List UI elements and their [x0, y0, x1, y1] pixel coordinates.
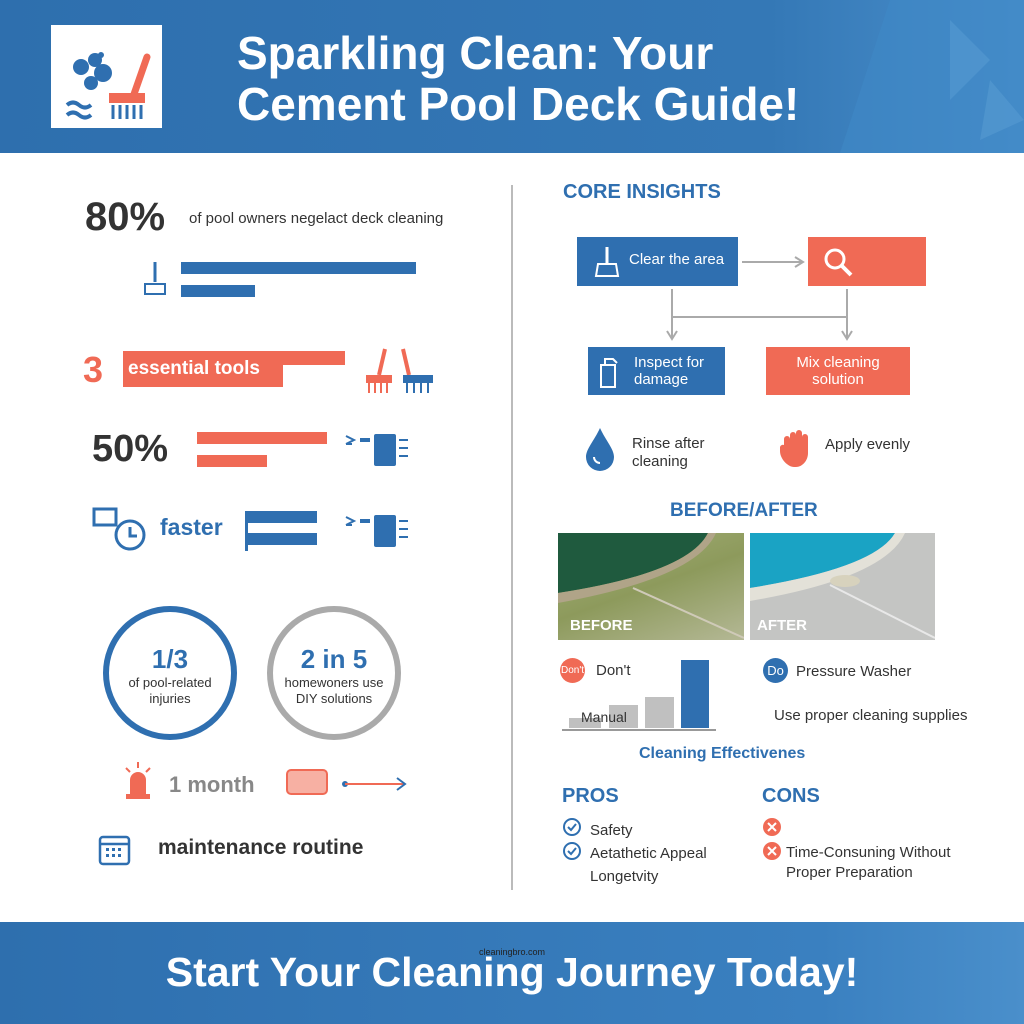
1 month row: 1 month [169, 772, 255, 797]
stat 80% [85, 195, 443, 297]
circle stat 1/3: of pool-related [128, 675, 212, 690]
chart caption: Cleaning Effectivenes [639, 745, 805, 762]
stat 3 tools: essential tools [128, 358, 260, 379]
after photo [750, 533, 935, 640]
stat 80%: 80% [85, 195, 165, 239]
cons [762, 785, 951, 881]
stat faster: faster [160, 514, 223, 540]
apply evenly: Apply evenly [825, 436, 910, 453]
maintenance routine [98, 836, 363, 866]
before photo [558, 533, 744, 640]
before/after heading: BEFORE/AFTER [670, 500, 818, 521]
apply evenly [780, 430, 910, 467]
core insights heading: CORE INSIGHTS [563, 181, 721, 203]
logo icon [51, 25, 162, 128]
footer banner [0, 922, 1024, 1024]
after photo: AFTER [757, 617, 807, 634]
broom icon [144, 262, 166, 295]
footer banner: cleaningbro.com [479, 947, 545, 957]
pros [562, 785, 707, 885]
stat 3 tools: 3 [83, 349, 103, 390]
flowchart: Clear the area [629, 251, 724, 268]
call to action: Start Your Cleaning Journey Today! [166, 949, 858, 995]
rinse [586, 428, 705, 471]
title [237, 27, 799, 130]
flowchart: Mix cleaning [796, 354, 880, 371]
bar chart [560, 658, 716, 731]
do list: Use proper cleaning supplies [774, 707, 967, 724]
circle stat 2 in 5: DIY solutions [296, 691, 372, 706]
decorative triangles [950, 20, 978, 100]
cons: CONS [762, 785, 820, 807]
bar chart: Don't [596, 662, 631, 679]
stat 3 tools [83, 348, 433, 393]
circle stat 2 in 5 [267, 606, 401, 740]
flowchart: Inspect for [634, 354, 704, 371]
washer icon [346, 434, 408, 466]
circle stat 1/3 [103, 606, 237, 740]
divider [511, 185, 513, 890]
stat 50% [92, 428, 408, 470]
cons: Proper Preparation [786, 864, 913, 881]
header banner [0, 0, 1024, 153]
title: Sparkling Clean: Your [237, 27, 713, 79]
pros: Safety [590, 822, 633, 839]
pros: PROS [562, 785, 619, 807]
pros: Longetvity [590, 868, 658, 885]
tools icon [366, 348, 433, 393]
flowchart: solution [812, 371, 864, 388]
circle stat 1/3: injuries [149, 691, 191, 706]
do list: Do [767, 663, 784, 678]
circle stat 2 in 5: 2 in 5 [301, 644, 367, 674]
bar chart: Don't [561, 665, 584, 676]
do list: Pressure Washer [796, 663, 911, 680]
rinse: Rinse after [632, 435, 705, 452]
flowchart [577, 237, 926, 395]
bar chart: Manual [581, 709, 627, 725]
circle stat 2 in 5: homewoners use [284, 675, 384, 690]
before photo: BEFORE [570, 617, 633, 634]
stat 50%: 50% [92, 428, 168, 470]
pros: Aetathetic Appeal [590, 845, 707, 862]
title: Cement Pool Deck Guide! [237, 78, 799, 130]
cons: Time-Consuning Without [786, 844, 951, 861]
1 month row [125, 762, 406, 799]
stat faster [92, 508, 408, 551]
flowchart: damage [634, 371, 688, 388]
rinse: cleaning [632, 453, 688, 470]
circle stat 1/3: 1/3 [152, 644, 188, 674]
stat 80%: of pool owners negelact deck cleaning [189, 210, 443, 227]
do list [763, 658, 967, 724]
maintenance routine: maintenance routine [158, 836, 363, 859]
